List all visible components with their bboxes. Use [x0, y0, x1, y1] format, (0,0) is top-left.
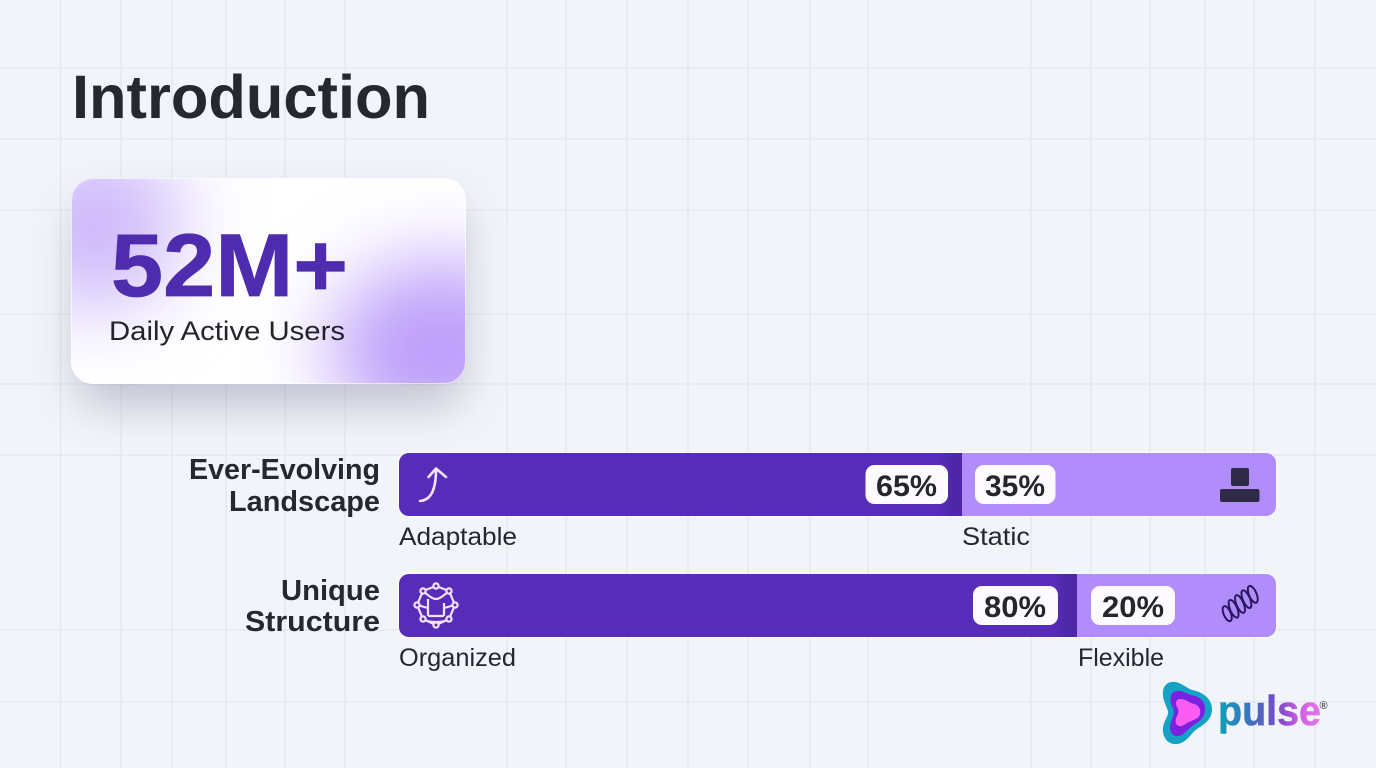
value pill: 80% — [973, 586, 1058, 625]
value pill: 35% — [975, 465, 1056, 504]
label: adaptable: Adaptable — [399, 523, 517, 551]
icon: spring — [1217, 583, 1264, 625]
title: Introduction — [72, 63, 430, 131]
stat label: Daily Active Users — [109, 316, 345, 346]
icon: organized network — [414, 583, 458, 628]
logo: pulse — [1163, 682, 1328, 744]
icon: static block on base — [1220, 468, 1260, 502]
value pill: 20% — [1091, 586, 1175, 625]
icon: pulse blob mark — [1163, 682, 1212, 744]
value pill: 80%: 80% — [984, 591, 1046, 624]
chart: organized vs flexible bar — [398, 573, 1277, 638]
panel: daily active users stat card — [56, 178, 484, 426]
icon: curved up arrow — [420, 468, 446, 501]
label: organized: Organized — [399, 644, 516, 672]
wordmark: pulse — [1218, 687, 1321, 734]
chart: adaptable vs static bar — [398, 452, 1277, 517]
value pill: 65% — [866, 465, 948, 504]
heading: ever-evolving landscape — [189, 454, 380, 518]
heading: unique structure — [245, 575, 380, 638]
value pill: 35%: 35% — [985, 470, 1045, 503]
value pill: 20%: 20% — [1102, 591, 1164, 624]
label: flexible: Flexible — [1078, 644, 1164, 672]
registered mark: ® — [1320, 700, 1328, 712]
heading: ever-evolving landscape: Landscape — [229, 486, 380, 518]
heading: unique structure: Unique — [281, 575, 380, 607]
heading: ever-evolving landscape: Ever-Evolving — [189, 454, 380, 486]
heading: unique structure: Structure — [245, 606, 380, 638]
label: static: Static — [962, 523, 1030, 551]
stat value: 52M+ — [111, 215, 348, 315]
value pill: 65%: 65% — [876, 470, 937, 503]
